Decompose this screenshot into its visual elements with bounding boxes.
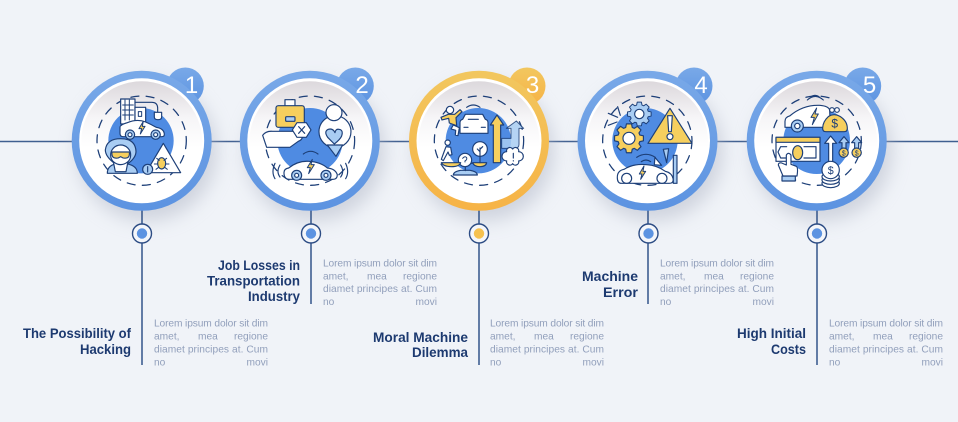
step 2 description: Lorem ipsum dolor sit dim <box>323 258 437 270</box>
step 5 description <box>829 318 943 368</box>
step 5 circle: 5 <box>863 72 876 99</box>
step 1 circle <box>72 68 217 365</box>
step 4 circle: 4 <box>694 72 708 99</box>
step 1 description: no <box>154 358 166 368</box>
icon: job loss and car <box>263 96 355 185</box>
step 1 title <box>23 325 131 357</box>
step 2 circle <box>240 68 385 304</box>
step 3 description: diamet principes at. Cum <box>490 344 604 356</box>
step 3 description: movi <box>582 358 604 368</box>
step 1 description: regione <box>234 332 268 342</box>
icon: car, purse and money: $ <box>842 150 846 157</box>
step 2 circle: 2 <box>355 72 369 99</box>
step 3 description: no <box>490 358 502 368</box>
step 1 circle: 1 <box>185 72 198 99</box>
step 3 title: Moral Machine <box>373 329 468 345</box>
icon: car, purse and money: $ <box>831 117 838 131</box>
step 4 description: amet, <box>660 272 685 282</box>
step 4 description: Lorem ipsum dolor sit dim <box>660 258 774 270</box>
step 4 description: no <box>660 297 672 308</box>
step 3 circle <box>409 68 554 365</box>
step 4 description: mea <box>704 272 724 282</box>
step 2 description: diamet principes at. Cum <box>323 284 437 295</box>
step 3 description: regione <box>570 332 604 342</box>
step 2 description: regione <box>403 272 437 282</box>
step 4 description: regione <box>740 272 774 282</box>
step 5 description: movi <box>921 358 943 368</box>
step 4 description: movi <box>752 297 774 308</box>
step 2 description: movi <box>415 297 437 308</box>
step 5 description: no <box>829 358 841 368</box>
icon: car, purse and money: $ <box>828 165 834 177</box>
step 3 description: amet, <box>490 332 515 342</box>
icon: car, purse and money: $ <box>855 150 859 157</box>
step 2 title <box>207 257 300 304</box>
step 2 description: amet, <box>323 272 348 282</box>
step 1 description: movi <box>246 358 268 368</box>
step 1 description: Lorem ipsum dolor sit dim <box>154 318 268 330</box>
step 5 description: regione <box>909 332 943 342</box>
step 4 title: Machine <box>582 268 638 284</box>
step 5 description: Lorem ipsum dolor sit dim <box>829 318 943 330</box>
step 2 title: Job Losses in <box>218 257 300 273</box>
step 5 description: mea <box>873 332 893 342</box>
step 3 description: Lorem ipsum dolor sit dim <box>490 318 604 330</box>
step 1 description <box>154 318 268 368</box>
step 1 title: The Possibility of <box>23 325 131 341</box>
step 3 title: Dilemma <box>412 344 468 360</box>
step 2 title: Industry <box>248 288 300 304</box>
step 4 description <box>660 258 774 308</box>
step 3 circle: 3 <box>526 72 539 99</box>
step 5 title: Costs <box>771 341 806 357</box>
step 2 description <box>323 258 437 308</box>
step 1 title: Hacking <box>80 341 131 357</box>
timeline horizontal line <box>0 140 958 142</box>
step 2 description: mea <box>367 272 387 282</box>
icon: moral dilemma <box>434 96 524 185</box>
step 4 title <box>582 268 639 300</box>
icon: hacker, car and warning <box>97 96 186 185</box>
step 3 description: mea <box>534 332 554 342</box>
step 5 circle <box>747 68 892 365</box>
step 2 title: Transportation <box>207 272 300 288</box>
step 1 description: mea <box>198 332 218 342</box>
icon: car, purse and money <box>772 95 862 188</box>
step 3 description <box>490 318 604 368</box>
step 5 title <box>737 325 806 357</box>
step 4 circle <box>578 68 723 304</box>
step 3 title <box>373 329 468 360</box>
step 2 description: no <box>323 297 335 308</box>
step 5 description: diamet principes at. Cum <box>829 344 943 356</box>
step 1 description: diamet principes at. Cum <box>154 344 268 356</box>
step 4 title: Error <box>603 284 639 300</box>
step 4 description: diamet principes at. Cum <box>660 284 774 295</box>
step 5 description: amet, <box>829 332 854 342</box>
icon: machine error <box>603 96 692 185</box>
step 1 description: amet, <box>154 332 179 342</box>
step 5 title: High Initial <box>737 325 806 341</box>
